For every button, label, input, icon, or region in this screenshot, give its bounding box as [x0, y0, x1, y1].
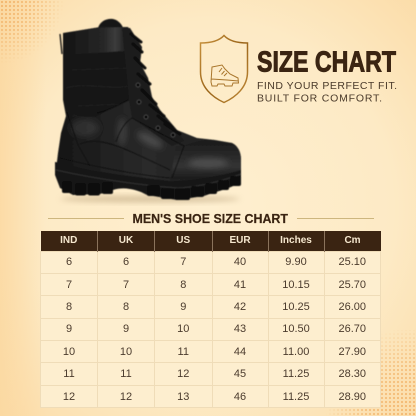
- size chart table: 7: [66, 279, 72, 291]
- size chart table: 12: [120, 391, 132, 403]
- icon: shield with boot: [200, 36, 248, 102]
- size chart table: 7: [180, 256, 186, 268]
- table title: MEN'S SHOE SIZE CHART: [132, 211, 288, 226]
- fabric panel: [64, 51, 130, 117]
- size chart table: 10.25: [282, 301, 310, 313]
- size chart table: 10.50: [282, 323, 310, 335]
- halftone dots top left: [1, 1, 59, 58]
- size chart table: US: [176, 235, 190, 246]
- boot shadow: [60, 196, 240, 202]
- size chart table: 40: [234, 256, 246, 268]
- size chart table: 11.00: [283, 346, 309, 358]
- boot upper: [56, 27, 241, 184]
- size chart table: 26.70: [338, 323, 366, 335]
- shield outline: [200, 36, 248, 102]
- size chart table: 8: [180, 279, 186, 291]
- size chart table: EUR: [229, 235, 251, 246]
- size chart table: 12: [177, 368, 189, 380]
- size chart table: 25.70: [338, 279, 366, 291]
- size chart table: 27.90: [338, 346, 366, 358]
- size chart table: UK: [119, 235, 133, 246]
- size chart table: 9: [180, 301, 186, 313]
- size chart table: 28.30: [338, 368, 366, 380]
- size chart table: 28.90: [338, 391, 366, 403]
- size chart table: 11.25: [283, 368, 309, 380]
- size chart table: 8: [123, 301, 129, 313]
- size chart table: 41: [234, 279, 246, 291]
- size chart table: 11: [178, 346, 189, 358]
- size chart table: 11: [120, 368, 132, 380]
- tongue: [98, 19, 124, 30]
- sole welt: [56, 170, 241, 188]
- size chart table: 44: [234, 346, 246, 358]
- size chart table: [40, 231, 381, 408]
- size chart table: 10: [177, 323, 189, 335]
- leather highlights: [71, 118, 228, 168]
- size chart table: 25.10: [338, 256, 366, 268]
- size chart table: Cm: [344, 235, 361, 246]
- tagline line 1: FIND YOUR PERFECT FIT.: [257, 80, 397, 92]
- size chart table: 11: [63, 368, 75, 380]
- toe cap: [170, 140, 241, 180]
- size chart table: 10.15: [282, 279, 310, 291]
- size chart table: 10: [63, 346, 75, 358]
- size chart table: 6: [66, 256, 72, 268]
- boot icon: [211, 65, 238, 86]
- laces: [131, 34, 180, 134]
- sole lugs: [62, 176, 241, 200]
- size chart table: 8: [66, 301, 72, 313]
- seams: [60, 100, 184, 178]
- size chart table: 9: [123, 323, 129, 335]
- size chart table: 26.00: [338, 301, 366, 313]
- halftone dots bottom right: [333, 333, 415, 415]
- size chart table: 9.90: [285, 256, 307, 268]
- tagline line 2: BUILT FOR COMFORT.: [257, 92, 382, 104]
- lace panel: [122, 28, 184, 146]
- size chart table: 10: [120, 346, 132, 358]
- sole: [55, 162, 241, 200]
- collar: [63, 27, 130, 54]
- size chart table: 12: [63, 391, 75, 403]
- size chart table: Inches: [280, 235, 312, 246]
- size chart table: 9: [66, 323, 72, 335]
- boot photo: [55, 19, 241, 200]
- size chart table: 13: [177, 391, 189, 403]
- eyelets: [136, 83, 175, 137]
- size chart table: 11.25: [283, 391, 309, 403]
- size chart table: IND: [60, 235, 77, 246]
- size chart table: 45: [234, 368, 246, 380]
- size chart table: 43: [234, 323, 246, 335]
- size chart table: 46: [234, 391, 246, 403]
- size chart table: 42: [234, 301, 246, 313]
- pull strap: [60, 34, 62, 54]
- size chart table: 6: [123, 256, 129, 268]
- size chart table: 7: [123, 279, 129, 291]
